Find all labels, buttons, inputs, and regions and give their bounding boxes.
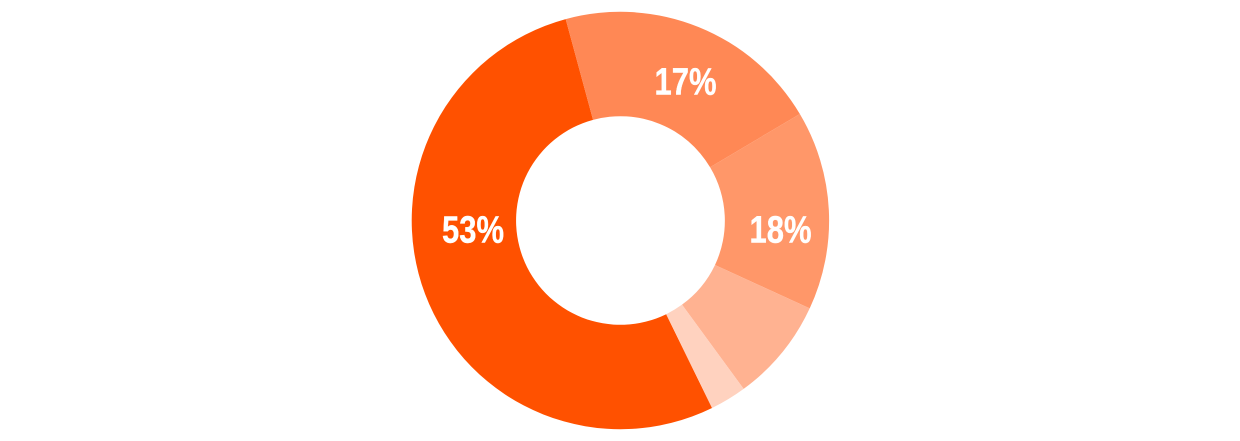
segment: 17%	[566, 12, 800, 167]
donut chart	[412, 12, 829, 429]
segment: unlabelled palest orange	[666, 305, 744, 408]
label: 53%: 53%	[442, 210, 504, 252]
segment: 18%	[710, 114, 829, 308]
label: 17%: 17%	[654, 62, 716, 104]
segment: unlabelled light orange	[682, 265, 810, 389]
label: 18%: 18%	[750, 210, 812, 252]
segment: 53%	[412, 19, 712, 429]
